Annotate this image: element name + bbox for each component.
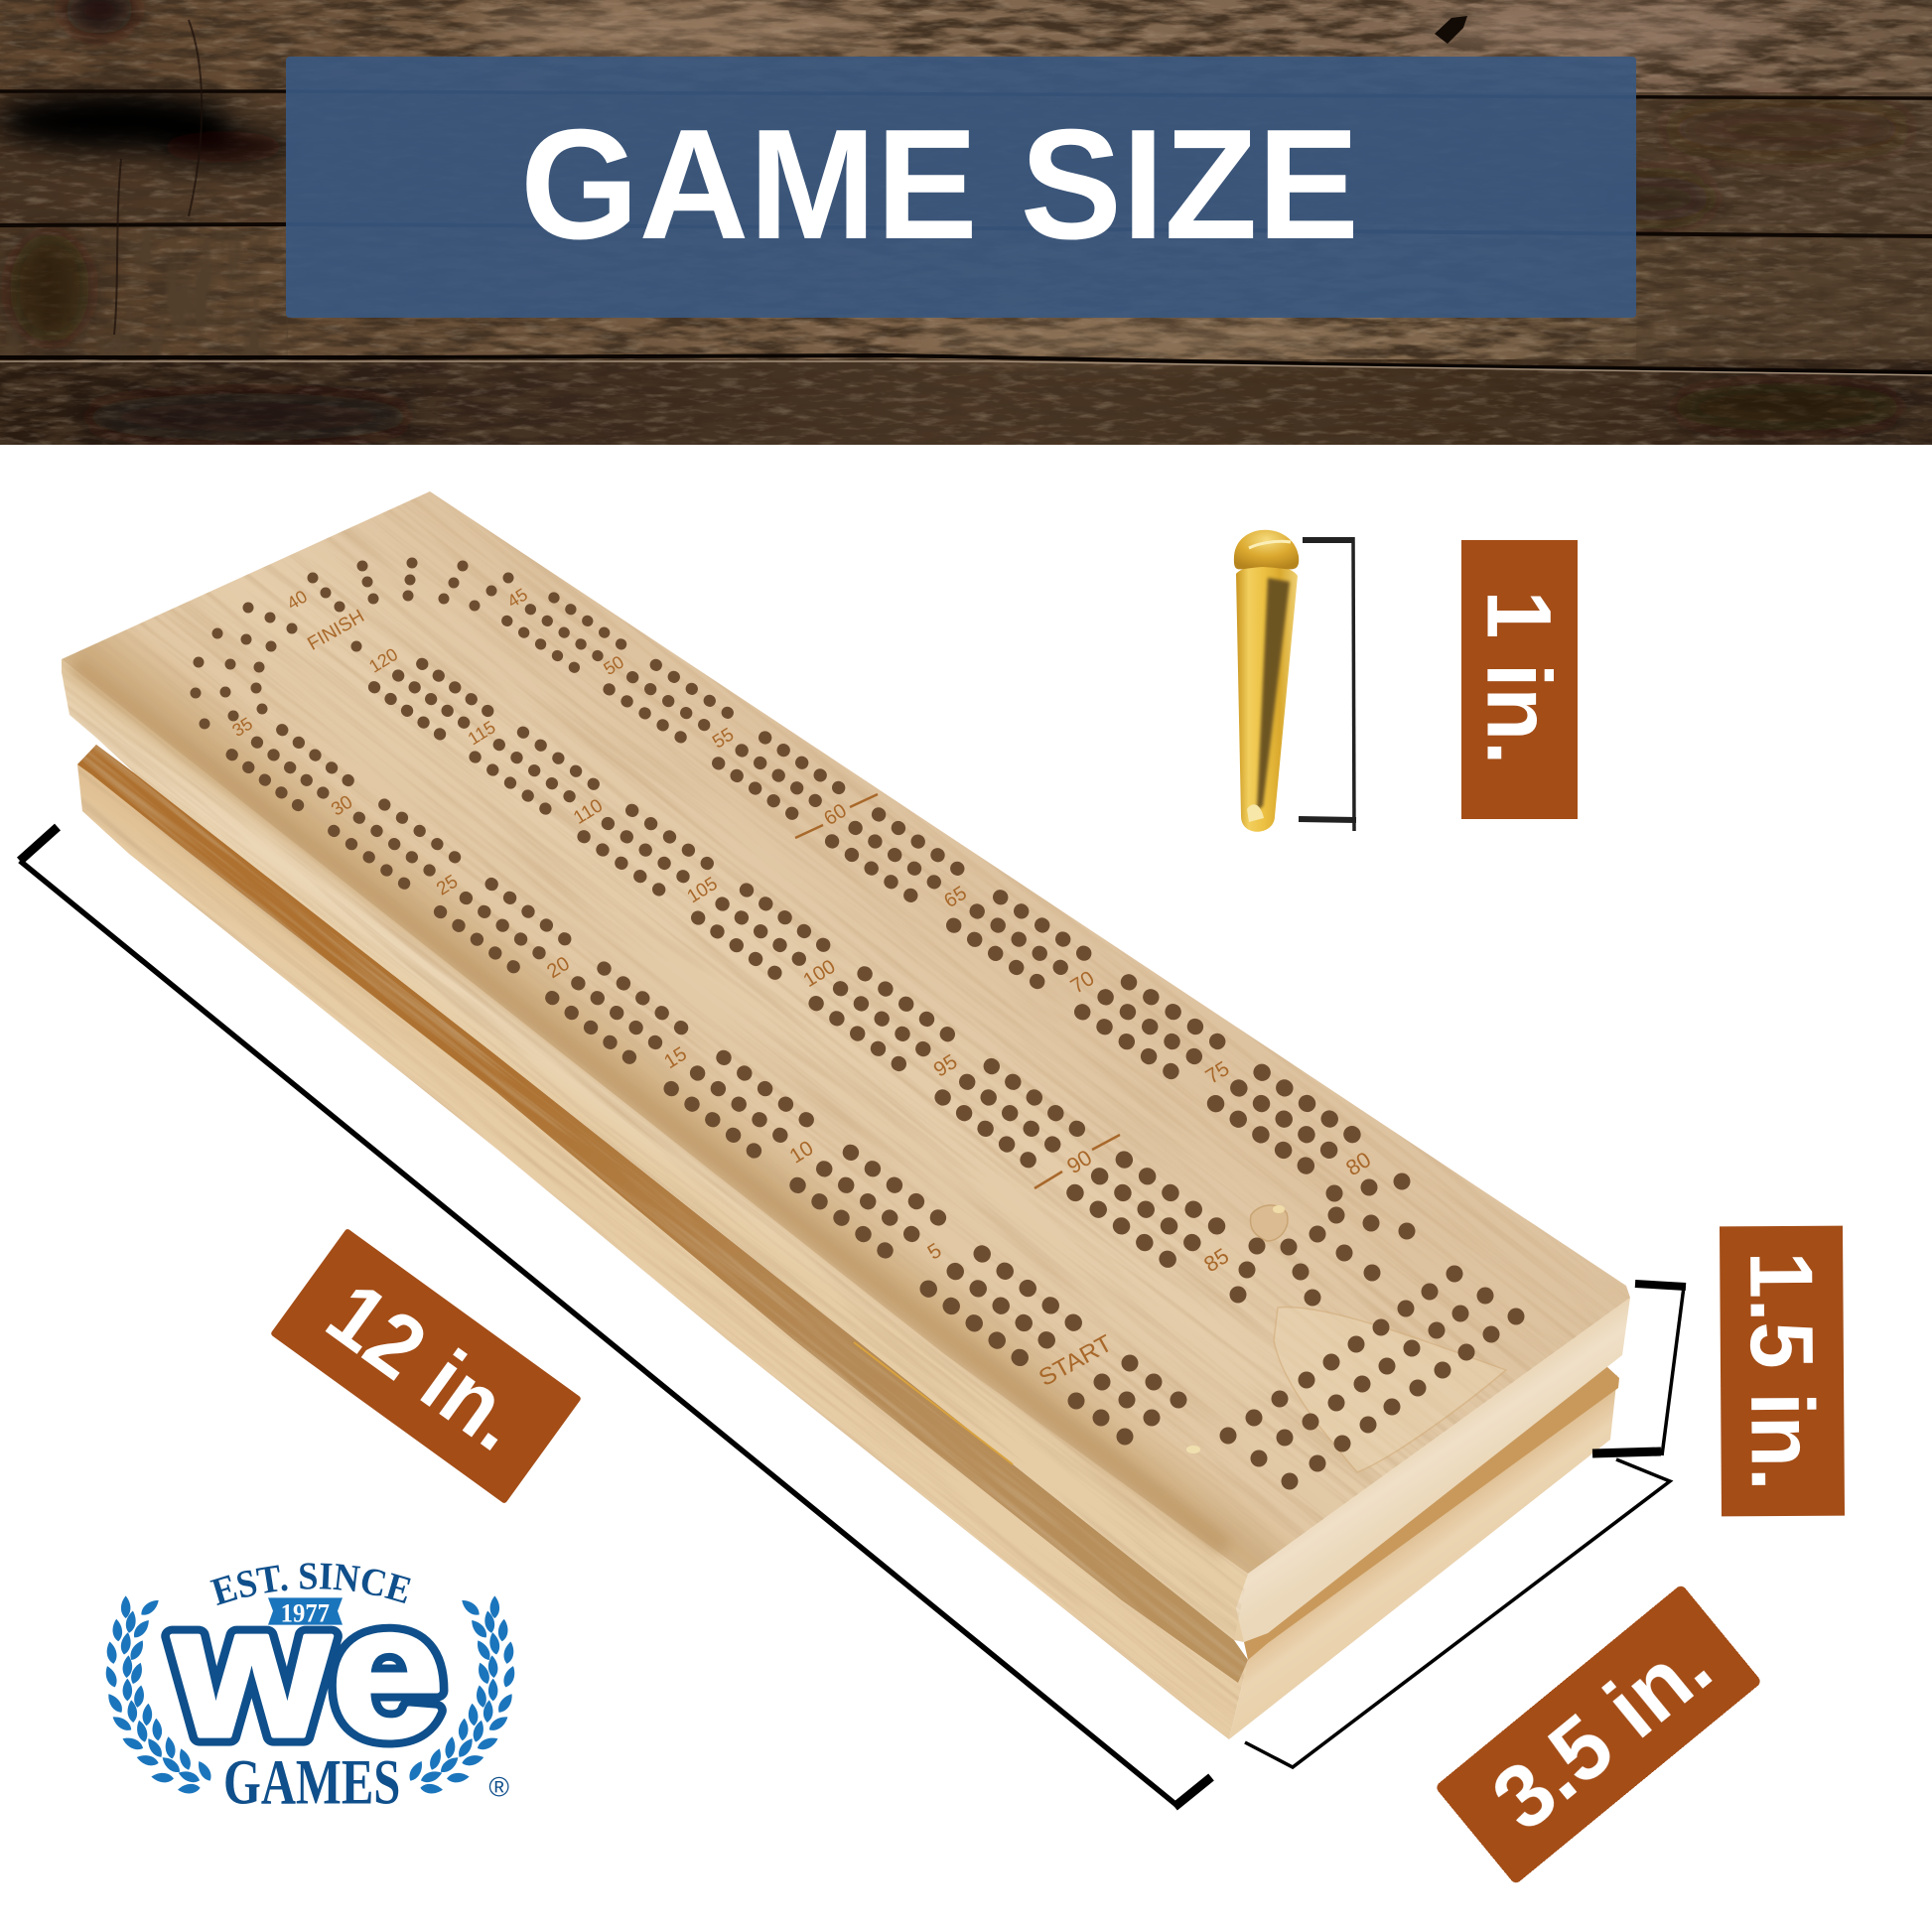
engraved score numbers: 100 (800, 956, 840, 992)
engraved score numbers: 50 (600, 651, 627, 679)
1.5 in. dimension bracket (1592, 1284, 1686, 1455)
1 in. dimension bracket (1299, 537, 1356, 831)
logo: we wordmark: we (172, 1566, 444, 1776)
engraved score numbers: 60 (820, 800, 851, 830)
upper board end grain (1236, 1298, 1630, 1642)
engraved score numbers: 15 (660, 1043, 691, 1073)
logo: 1977 ribbon: 1977 (281, 1597, 330, 1627)
pegging holes: score blocks (232, 598, 1352, 1358)
logo: games: GAMES (223, 1747, 400, 1819)
upper board long side (62, 659, 1248, 1642)
small pale knot (1186, 1446, 1200, 1453)
engraved score numbers: FINISH (304, 606, 368, 655)
12 in. bracket long line (20, 861, 1176, 1805)
engraved score numbers: 35 (228, 713, 256, 741)
12 in. bracket end tick (1174, 1777, 1211, 1807)
engraved score numbers: 70 (1066, 967, 1098, 999)
label: 3.5 in.: 3.5 in. (1474, 1615, 1729, 1850)
logo: est since (216, 1588, 411, 1605)
engraved score numbers: 10 (785, 1137, 817, 1169)
engraved score numbers: 30 (328, 791, 356, 820)
engraved score numbers: 110 (570, 795, 607, 829)
label: 1 in.: 1 in. (1467, 590, 1569, 764)
engraved score numbers: 75 (1201, 1057, 1233, 1089)
label: 12 in. (270, 1228, 582, 1504)
logo wreath left (103, 1595, 214, 1794)
lower board top sliver (1244, 1366, 1619, 1660)
lower board end grain (1229, 1375, 1617, 1739)
icon: gold peg (1234, 530, 1299, 832)
engraved score numbers: 20 (543, 953, 574, 983)
groove gold edge (854, 1342, 1013, 1464)
engraved score numbers: 45 (503, 584, 531, 612)
label: 1.5 in.: 1.5 in. (1730, 1251, 1832, 1491)
groove strip (77, 745, 1248, 1683)
engraved score numbers: 105 (684, 874, 722, 907)
engraved score numbers: 115 (465, 717, 499, 749)
cribbage board (0, 278, 1645, 1779)
label: 12 in.: 12 in. (310, 1264, 541, 1470)
logo: we wordmark: we (172, 1566, 444, 1776)
label: 3.5 in. (1435, 1584, 1762, 1885)
engraved tick marks at 60 and 90 (795, 794, 1120, 1188)
engraved score numbers: START (1035, 1329, 1117, 1392)
logo wreath right (406, 1595, 517, 1794)
cathedral grain near board end (1274, 1307, 1506, 1472)
pegging holes: far end turn (196, 563, 508, 724)
wood grain overlay (62, 498, 1629, 1739)
logo: registered mark: ® (488, 1771, 509, 1802)
engraved score numbers: 95 (929, 1050, 961, 1082)
upper board top face (62, 491, 1630, 1574)
engraved score numbers: 90 (1062, 1145, 1096, 1178)
knot highlight (1273, 1205, 1285, 1213)
title banner (286, 57, 1636, 318)
12 in. dimension bracket (20, 827, 58, 861)
title: GAME SIZE: GAME SIZE (520, 97, 1359, 272)
label: 1 in. (1461, 540, 1578, 819)
logo: WE Games (105, 1563, 514, 1819)
engraved score numbers: 85 (1199, 1243, 1233, 1277)
engraved score numbers: 65 (940, 883, 971, 912)
lower board side (77, 745, 1248, 1739)
engraved score numbers: 55 (709, 724, 738, 753)
engraved score numbers: 120 (365, 644, 401, 677)
header: wood plank background (0, 0, 1932, 445)
engraved score numbers: 80 (1341, 1147, 1375, 1180)
engraved score numbers: 5 (923, 1239, 946, 1265)
knot (1251, 1205, 1288, 1241)
logo: WE Games: EST. SINCE (209, 1563, 411, 1605)
3.5 in. dimension bracket (1245, 1459, 1670, 1767)
pegging holes: near end turn and start pegs (1076, 1181, 1516, 1481)
engraved score numbers: 25 (433, 871, 462, 899)
engraved score numbers: 40 (283, 586, 311, 614)
engraved score numbers (228, 584, 1375, 1392)
